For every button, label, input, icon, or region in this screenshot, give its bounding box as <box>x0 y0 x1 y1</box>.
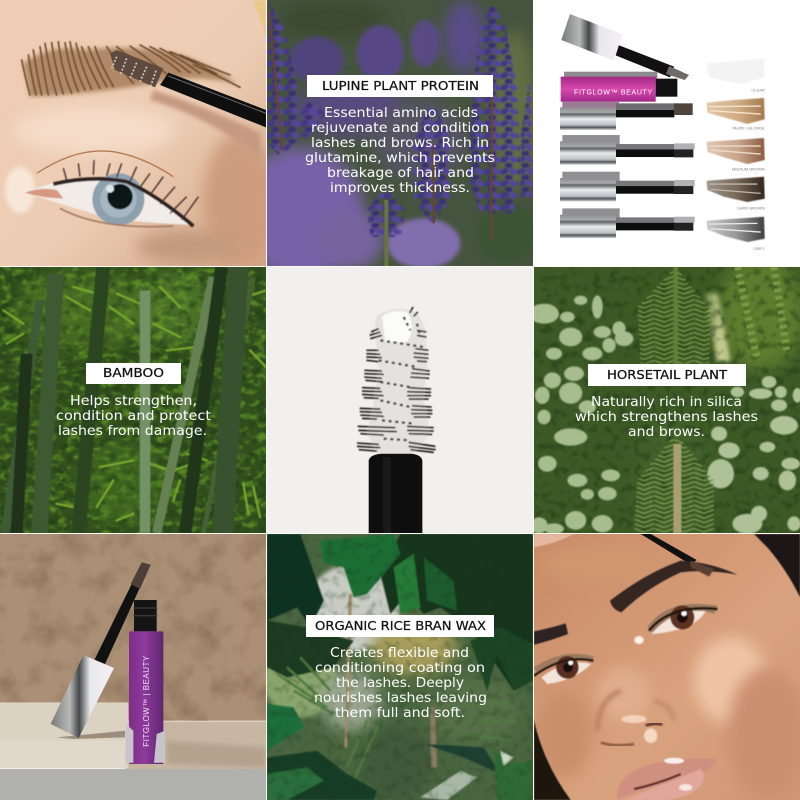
panel: eye and brow application photo <box>0 0 277 267</box>
heading: organic rice bran wax <box>306 615 494 637</box>
right brow <box>610 561 737 612</box>
heading: horsetail plant: HORSETAIL PLANT <box>607 368 728 382</box>
panel: brush closeup <box>267 267 533 533</box>
text: bamboo description <box>56 393 211 439</box>
shade brush: taupe <box>560 102 693 130</box>
left eye <box>534 654 594 674</box>
swatch: taupe / blonde <box>707 98 765 131</box>
heading: bamboo: BAMBOO <box>103 366 164 380</box>
panel: product on stone <box>0 534 266 800</box>
eyelid crease <box>37 151 173 177</box>
panel: lupine plant protein <box>267 0 533 266</box>
heading: bamboo <box>86 363 181 384</box>
panel: horsetail plant <box>529 257 800 544</box>
eyebrow <box>22 42 240 97</box>
swatch: taupe / blonde: TAUPE / BLONDE <box>732 126 765 131</box>
text: rice bran wax description <box>314 645 487 721</box>
brush wand <box>160 73 266 127</box>
wand <box>641 534 697 565</box>
text: lupine description: Essential amino acids <box>324 105 478 121</box>
text: lupine description: glutamine, which prevents <box>305 150 495 166</box>
nose <box>597 636 674 745</box>
swatch: medium brown: MEDIUM BROWN <box>732 167 765 172</box>
stone wall <box>0 534 266 721</box>
lower stone <box>0 769 266 800</box>
text: lupine description: improves thickness. <box>330 180 470 196</box>
wand and bristles <box>94 562 151 664</box>
text: rice bran wax description: Creates flexible and <box>330 645 469 661</box>
tube: FITGLOW™ | BEAUTY <box>142 655 151 747</box>
hair <box>754 534 800 597</box>
bamboo trunks <box>5 267 253 533</box>
shade brush: dark brown <box>560 172 695 201</box>
heading: lupine plant protein <box>307 75 493 97</box>
spoolie brush <box>110 50 163 87</box>
heading: organic rice bran wax: ORGANIC RICE BRAN WAX <box>315 619 486 633</box>
swatch: medium brown <box>707 138 765 172</box>
lips <box>617 758 717 800</box>
swatch: grey: GREY <box>753 246 765 251</box>
text: horsetail description: Naturally rich in silica <box>591 394 742 410</box>
cap <box>51 655 114 738</box>
text: bamboo description: Helps strengthen, <box>70 393 197 409</box>
panel: bamboo <box>0 267 266 533</box>
tube <box>125 631 165 764</box>
horsetail stalks <box>634 267 714 533</box>
text: lupine description: lashes and brows. Rich in <box>311 135 489 151</box>
text: rice bran wax description: conditioning coating on <box>315 660 485 676</box>
panel: organic rice bran wax <box>264 534 533 800</box>
text: horsetail description: and brows. <box>628 424 705 440</box>
swatch: clear <box>707 59 765 93</box>
brow shadow <box>150 90 260 157</box>
palms <box>277 657 520 781</box>
text: lupine description: breakage of hair and <box>327 165 474 181</box>
swatch: dark brown <box>707 177 765 210</box>
text: lupine description: rejuvenate and condition <box>311 120 489 136</box>
lashes <box>53 179 193 226</box>
horsetail photo <box>529 257 800 544</box>
text: lupine description <box>305 105 495 196</box>
stone ledge left <box>0 702 128 768</box>
left brow <box>534 623 568 645</box>
bamboo photo <box>0 267 266 533</box>
text: rice bran wax description: them full and soft. <box>335 705 465 721</box>
panel: model face photo <box>534 534 800 800</box>
open cap and brush <box>561 14 689 80</box>
panel: product shades <box>560 14 766 250</box>
text: horsetail description <box>575 394 758 440</box>
jungle photo <box>264 534 533 800</box>
eye <box>25 160 198 227</box>
bamboo leaves <box>3 287 266 520</box>
black ferrule <box>369 454 422 533</box>
swatch: dark brown: DARK BROWN <box>737 205 765 210</box>
text: rice bran wax description: the lashes. Deeply <box>336 675 464 691</box>
shade brush: grey <box>560 208 695 238</box>
text: bamboo description: lashes from damage. <box>58 423 207 439</box>
top leaves <box>380 534 533 691</box>
text: rice bran wax description: nourishes lashes leaving <box>314 690 487 706</box>
lupine photo <box>267 0 533 266</box>
tube with magenta label <box>561 72 677 102</box>
brush head <box>357 307 436 454</box>
right eye <box>647 604 717 634</box>
flower spikes <box>257 3 533 237</box>
swatch: clear: CLEAR <box>751 88 765 93</box>
tube with magenta label: FITGLOW™ BEAUTY <box>574 90 653 97</box>
text: bamboo description: condition and protect <box>56 408 211 424</box>
heading: lupine plant protein: LUPINE PLANT PROTEIN <box>322 79 479 93</box>
shade brush: medium brown <box>560 135 695 165</box>
heading: horsetail plant <box>588 364 746 386</box>
pale leaves right <box>707 376 800 534</box>
neck <box>133 600 157 631</box>
fingertip <box>534 534 574 547</box>
swatch: grey <box>707 217 765 251</box>
lower leaves <box>267 704 304 751</box>
background horsetail rows <box>737 267 787 360</box>
pale leaves left <box>529 295 633 534</box>
text: horsetail description: which strengthens lashes <box>575 409 758 425</box>
stone surface right <box>125 721 266 771</box>
